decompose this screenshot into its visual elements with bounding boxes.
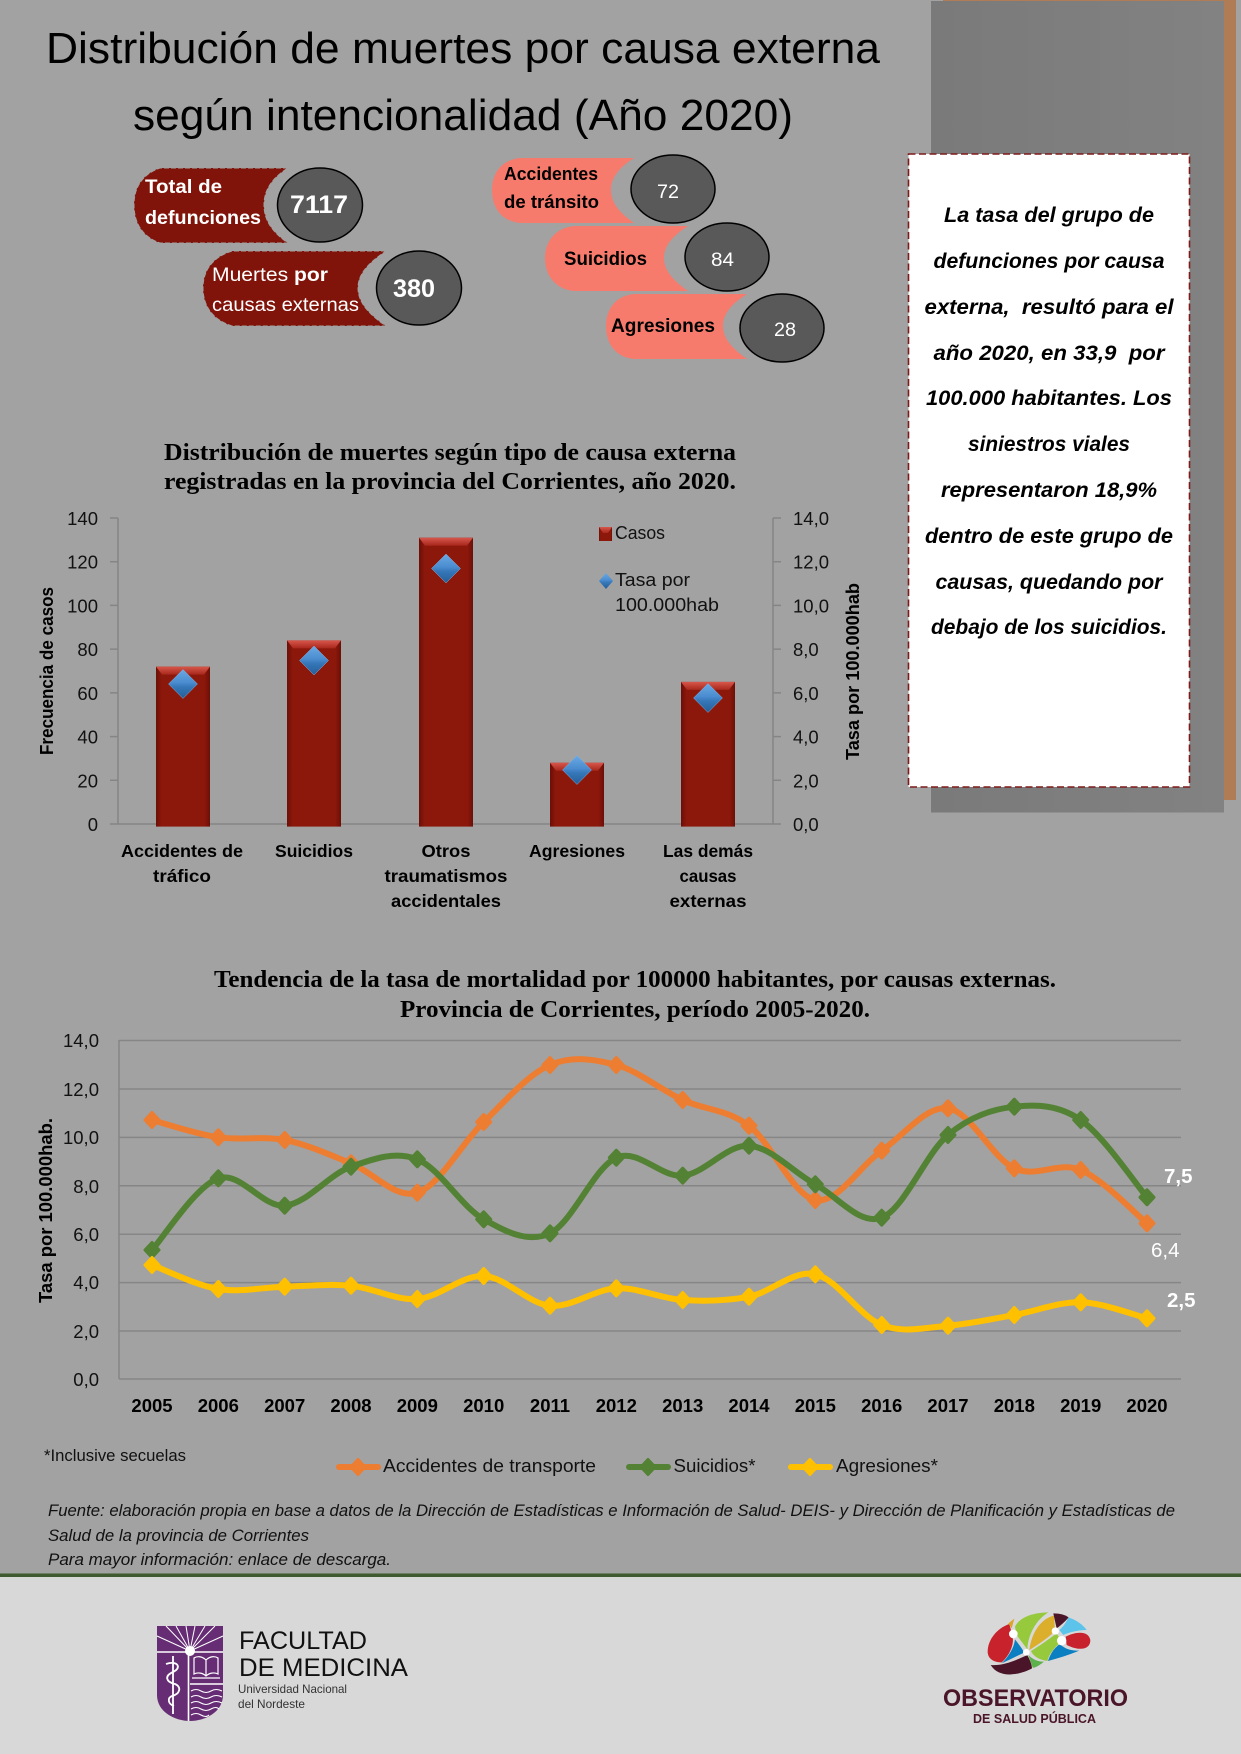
right axis labels: 14,0 — [793, 508, 829, 529]
bar chart legend: 100.000hab — [615, 595, 719, 615]
x axis years: 2019 — [1060, 1395, 1101, 1416]
stat: suicidios: 84 — [711, 250, 734, 271]
logo: Facultad de Medicina — [157, 1626, 408, 1721]
bar: las demás causas — [681, 682, 735, 827]
left axis labels: 20 — [77, 770, 98, 791]
line chart title: Tendencia de la tasa de mortalidad por 100000 habitantes, por causas externas. — [214, 966, 1056, 993]
category labels: Otros — [422, 841, 471, 861]
bar: agresiones — [550, 756, 604, 827]
callout text: defunciones por causa — [934, 250, 1165, 273]
bar chart title: registradas en la provincia del Corrientes, año 2020. — [164, 469, 736, 495]
line chart: tendencia 2005-2020 — [36, 1030, 1196, 1416]
left axis labels: 100 — [67, 595, 98, 616]
stat: total de defunciones: defunciones — [145, 207, 261, 229]
category labels: Las demás — [663, 841, 753, 861]
callout text: siniestros viales — [968, 433, 1130, 456]
observatorio wordmark — [943, 1685, 1128, 1726]
x axis years: 2011 — [530, 1395, 570, 1416]
x axis years: 2010 — [463, 1395, 504, 1416]
category labels: Agresiones — [529, 841, 625, 861]
series: accidentes de transporte — [145, 1058, 1154, 1231]
logo wordmark: del Nordeste — [238, 1697, 305, 1711]
x axis years: 2017 — [927, 1395, 969, 1416]
stat: accidentes de tránsito — [492, 155, 715, 223]
icon: shield — [157, 1626, 223, 1721]
callout text: año 2020, en 33,9 por — [934, 342, 1166, 365]
y axis labels: 0,0 — [73, 1369, 99, 1390]
x axis years: 2008 — [330, 1395, 372, 1416]
x axis years: 2016 — [861, 1395, 902, 1416]
title — [46, 24, 881, 140]
stat: muertes por causas externas — [203, 251, 462, 326]
callout text: La tasa del grupo de — [944, 204, 1154, 227]
icon: brain — [988, 1612, 1090, 1674]
line chart legend: Accidentes de transporte — [383, 1456, 596, 1476]
observatorio wordmark: DE SALUD PÚBLICA — [973, 1711, 1097, 1726]
bar chart title — [164, 440, 736, 495]
stat: accidentes de tránsito: de tránsito — [504, 192, 599, 212]
line chart legend: Suicidios* — [674, 1456, 756, 1476]
left axis labels: 60 — [77, 683, 98, 704]
series: agresiones — [145, 1258, 1154, 1333]
bar: suicidios — [287, 640, 341, 827]
left axis labels: 40 — [77, 727, 98, 748]
logo wordmark: Universidad Nacional — [238, 1682, 347, 1696]
right axis labels: 8,0 — [793, 639, 819, 660]
category labels: Suicidios — [275, 841, 353, 861]
y axis labels: 8,0 — [73, 1176, 99, 1197]
title: según intencionalidad (Año 2020) — [133, 91, 793, 140]
source note: Para mayor información: enlace de descarga. — [48, 1551, 391, 1569]
stat: accidentes de tránsito: Accidentes — [504, 164, 598, 184]
stat: total de defunciones — [134, 168, 362, 243]
x axis years: 2012 — [596, 1395, 637, 1416]
callout text: causas, quedando por — [936, 571, 1164, 594]
x axis years: 2006 — [198, 1395, 239, 1416]
right axis labels — [793, 508, 829, 835]
stat: muertes por causas externas: Muertes por — [212, 265, 329, 286]
footer band — [0, 1574, 1241, 1754]
category labels: Accidentes de — [121, 841, 243, 861]
bar chart legend — [599, 523, 719, 615]
bar: otros traumatismos — [419, 538, 473, 827]
source note: Fuente: elaboración propia en base a datos de la Dirección de Estadísticas e Información de Salud- DEIS- y Dirección de Planificación y Estadísticas de — [48, 1502, 1175, 1520]
end value labels: 2,5 — [1167, 1289, 1196, 1312]
series: suicidios — [145, 1099, 1154, 1258]
stat: total de defunciones: 7117 — [290, 191, 348, 219]
right axis labels: 6,0 — [793, 683, 819, 704]
callout text: dentro de este grupo de — [925, 525, 1173, 548]
left axis labels: 140 — [67, 508, 98, 529]
source note — [48, 1502, 1175, 1569]
logo wordmark: DE MEDICINA — [239, 1654, 408, 1682]
x axis years: 2013 — [662, 1395, 703, 1416]
line chart legend — [339, 1456, 938, 1476]
observatorio wordmark: OBSERVATORIO — [943, 1685, 1128, 1712]
callout text: 100.000 habitantes. Los — [926, 387, 1172, 410]
logo wordmark: FACULTAD — [239, 1627, 367, 1655]
y axis labels: 12,0 — [63, 1079, 99, 1100]
right axis labels: 10,0 — [793, 595, 829, 616]
logo wordmark — [238, 1627, 408, 1711]
stat: agresiones — [606, 294, 824, 362]
stat: muertes por causas externas: causas externas — [212, 295, 359, 316]
stat: muertes por causas externas: 380 — [393, 275, 435, 303]
y axis labels — [63, 1030, 99, 1390]
line chart legend: Agresiones* — [836, 1456, 938, 1476]
x axis years: 2009 — [397, 1395, 438, 1416]
bar chart legend: Tasa por — [615, 570, 690, 590]
x axis years: 2020 — [1126, 1395, 1168, 1416]
bar chart: casos y tasa — [37, 508, 863, 911]
x axis years: 2007 — [264, 1395, 305, 1416]
category labels: causas — [680, 866, 737, 886]
left axis labels: 0 — [88, 814, 98, 835]
category labels: tráfico — [153, 866, 211, 886]
left axis labels — [67, 508, 98, 835]
x axis years: 2014 — [728, 1395, 770, 1416]
category labels: externas — [670, 891, 747, 911]
callout text: externa, resultó para el — [924, 296, 1175, 319]
bar: accidentes de tráfico — [156, 667, 210, 827]
y axis labels: 2,0 — [73, 1321, 99, 1342]
callout text: representaron 18,9% — [941, 479, 1157, 502]
right axis title: Tasa por 100.000hab — [843, 583, 863, 760]
stat: suicidios: Suicidios — [564, 248, 647, 270]
y axis labels: 4,0 — [73, 1272, 99, 1293]
source note: Salud de la provincia de Corrientes — [48, 1527, 309, 1545]
title: Distribución de muertes por causa externa — [46, 24, 881, 73]
x axis years: 2005 — [131, 1395, 173, 1416]
x axis years: 2018 — [994, 1395, 1035, 1416]
line chart title — [214, 966, 1056, 1023]
right axis labels: 12,0 — [793, 552, 829, 573]
footnote: inclusive secuelas: *Inclusive secuelas — [44, 1447, 186, 1465]
category labels: traumatismos — [384, 866, 508, 886]
y axis title: Tasa por 100.000hab. — [36, 1118, 56, 1303]
x axis years — [131, 1395, 1168, 1416]
end value labels: 7,5 — [1164, 1165, 1192, 1188]
x axis years: 2015 — [795, 1395, 836, 1416]
bar chart legend: Casos — [615, 523, 665, 543]
stat: agresiones: Agresiones — [611, 315, 715, 337]
end value labels — [1151, 1165, 1196, 1312]
right axis labels: 4,0 — [793, 727, 819, 748]
category labels: accidentales — [391, 891, 501, 911]
panel: resumen lateral — [908, 0, 1236, 812]
left axis labels: 120 — [67, 552, 98, 573]
stat: agresiones: 28 — [774, 320, 796, 341]
line chart title: Provincia de Corrientes, período 2005-2020. — [400, 996, 870, 1023]
category labels — [121, 841, 753, 911]
right axis labels: 2,0 — [793, 770, 819, 791]
y axis labels: 6,0 — [73, 1224, 99, 1245]
y axis labels: 10,0 — [63, 1127, 99, 1148]
right axis labels: 0,0 — [793, 814, 819, 835]
logo: Observatorio de Salud Pública — [943, 1612, 1128, 1726]
stat: total de defunciones: Total de — [145, 176, 222, 198]
y axis labels: 14,0 — [63, 1030, 99, 1051]
left axis labels: 80 — [77, 639, 98, 660]
stat: suicidios — [545, 223, 769, 291]
callout text: debajo de los suicidios. — [931, 616, 1167, 639]
callout text — [924, 204, 1175, 639]
end value labels: 6,4 — [1151, 1239, 1180, 1262]
stat: accidentes de tránsito: 72 — [657, 182, 679, 203]
bar chart title: Distribución de muertes según tipo de causa externa — [164, 440, 736, 466]
left axis title: Frecuencia de casos — [37, 587, 57, 755]
